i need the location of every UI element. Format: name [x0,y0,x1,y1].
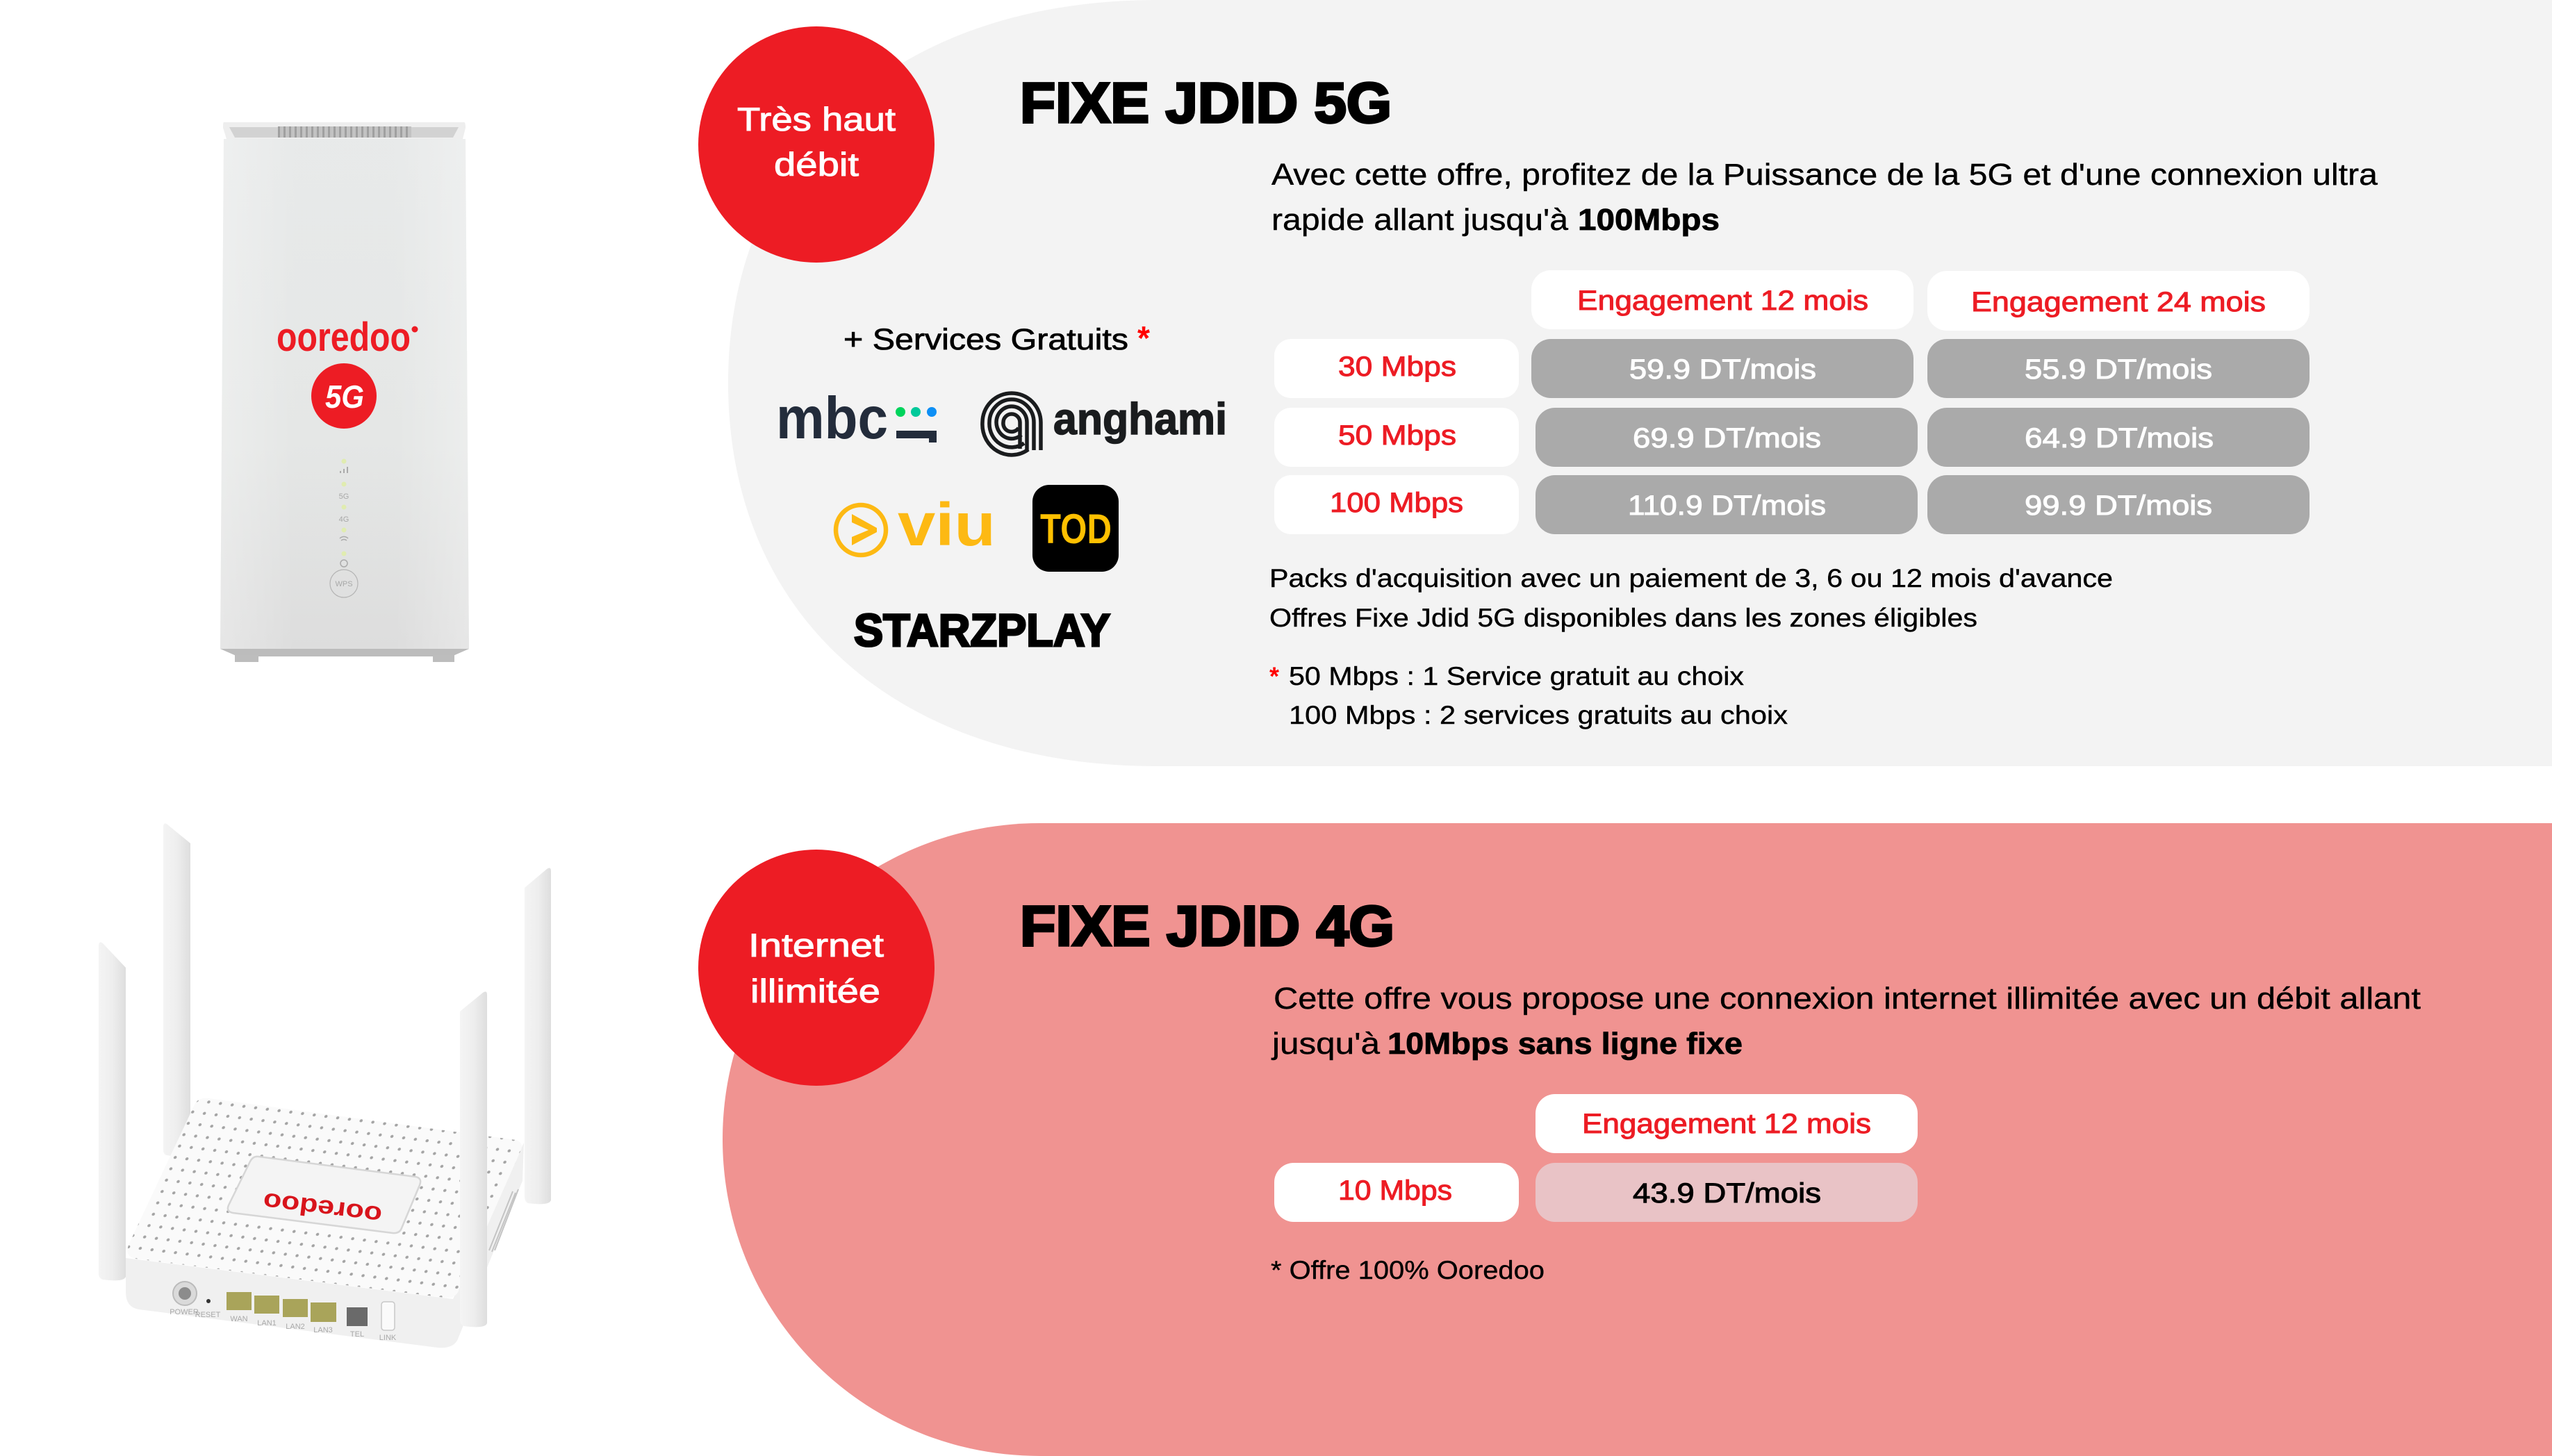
logo: viu: viu [898,491,996,559]
description 4G: jusqu'à [1271,1027,1381,1061]
notes 5G: Offres Fixe Jdid 5G disponibles dans les zones éligibles [1269,604,1977,632]
badge: Très haut débit: débit [774,146,859,183]
antenna front left [99,942,126,1280]
notes 5G [1269,564,2113,632]
price: 69.9 [1536,408,1918,467]
badge: Internet illimitée: Internet [748,927,884,963]
description 5G [1271,158,2378,237]
price: 43.9 [1536,1163,1918,1222]
rear ports: LAN1 [257,1319,277,1327]
router 4G base [118,1091,535,1348]
badge: Très haut débit [698,26,935,263]
panel 4G background [723,823,2552,1456]
router: Ooredoo 4G [99,823,551,1348]
notes 5G: Packs d'acquisition avec un paiement de 3, 6 ou 12 mois d'avance [1269,564,2113,593]
services heading: + Services Gratuits [843,323,1128,356]
pricing table 4G [1274,1094,1918,1222]
price: 69.9: 69.9 DT/mois [1633,423,1821,454]
pricing table 5G [1274,270,2310,534]
panel: Fixe Jdid 5G [698,0,2552,766]
footnote 5G [1269,662,1788,729]
description 5G: rapide allant jusqu'à [1271,203,1569,237]
antenna far right [525,868,551,1204]
price: 110.9: 110.9 DT/mois [1628,490,1826,521]
5G badge [311,363,377,429]
status LEDs: WPS [335,580,353,588]
5G badge: 5G [325,379,364,415]
logo: viu [836,491,996,559]
badge: Très haut débit: Très haut [737,101,896,138]
description 4G: 10Mbps sans ligne fixe [1388,1027,1743,1061]
rear ports: LAN3 [313,1326,333,1334]
status LEDs: 4G [339,515,349,524]
description 4G [1271,982,2421,1061]
description 4G: Cette offre vous propose une connexion internet illimitée avec un débit allant [1274,982,2421,1016]
badge: Internet illimitée [698,850,935,1086]
header: Engagement 12 mois [1531,270,1913,329]
description 5G: 100Mbps [1578,203,1720,237]
header: Engagement 12 mois: Engagement 12 mois [1577,286,1868,316]
row label: 30 Mbps [1274,339,1519,398]
status LEDs [330,458,358,597]
row label: 100 Mbps [1274,475,1519,534]
label plate [228,1157,420,1233]
price: 99.9 [1927,475,2310,534]
router 5G body [220,139,469,649]
header: Engagement 24 mois [1927,271,2310,331]
ooredoo logo: ooredoo [277,315,411,360]
price: 99.9: 99.9 DT/mois [2025,490,2212,521]
description 5G: Avec cette offre, profitez de la Puissance de la 5G et d'une connexion ultra [1271,158,2378,192]
rear ports: TEL [350,1330,364,1339]
price: 64.9: 64.9 DT/mois [2025,423,2214,454]
title 4G: FIXE JDID 4G [1020,895,1394,958]
label plate: ooredoo [261,1187,384,1230]
antenna front right [460,992,487,1327]
antenna back left [163,823,190,1157]
router 5G top cap and vents [223,122,466,139]
status LEDs: 5G [339,493,349,501]
price: 43.9: 43.9 DT/mois [1633,1178,1821,1209]
logo: mbc: mbc [776,386,888,452]
header: Engagement 24 mois: Engagement 24 mois [1971,287,2266,317]
title 5G: FIXE JDID 5G [1020,72,1392,135]
logo: STARZPLAY: STARZPLAY [854,604,1110,656]
rear ports: LINK [379,1334,397,1342]
rear ports: WAN [230,1315,248,1323]
row label: 10 Mbps: 10 Mbps [1338,1175,1452,1206]
logo: anghami: anghami [1053,394,1227,444]
logo: TOD: TOD [1040,506,1112,552]
logo: TOD [1032,485,1119,572]
header: Engagement 12 mois [1536,1094,1918,1153]
free services [776,320,1227,656]
footnote 5G: * [1269,662,1280,690]
price: 55.9: 55.9 DT/mois [2025,354,2212,385]
panel: Fixe Jdid 4G [698,823,2552,1456]
badge: Internet illimitée: illimitée [750,973,880,1009]
price: 59.9 [1531,339,1913,398]
row label: 10 Mbps [1274,1163,1519,1222]
price: 59.9: 59.9 DT/mois [1629,354,1816,385]
rear ports: LAN2 [286,1323,305,1331]
price: 55.9 [1927,339,2310,398]
rear ports [170,1282,397,1342]
rear ports: RESET [195,1311,221,1319]
row label: 100 Mbps: 100 Mbps [1330,488,1463,518]
row label: 50 Mbps: 50 Mbps [1338,420,1456,451]
router: Ooredoo 5G [220,122,469,662]
price: 64.9 [1927,408,2310,467]
footnote 4G: * Offre 100% Ooredoo [1271,1256,1545,1284]
panel 5G background [728,0,2552,766]
header: Engagement 12 mois: Engagement 12 mois [1582,1109,1871,1139]
router 5G base and feet [220,649,469,662]
services heading: * [1137,320,1150,357]
logo: anghami [982,393,1227,455]
footnote 5G: 50 Mbps : 1 Service gratuit au choix [1289,662,1745,690]
price: 110.9 [1536,475,1918,534]
footnote 5G: 100 Mbps : 2 services gratuits au choix [1289,701,1788,729]
rear ports: POWER [170,1308,199,1316]
row label: 50 Mbps [1274,408,1519,467]
row label: 30 Mbps: 30 Mbps [1338,351,1456,382]
